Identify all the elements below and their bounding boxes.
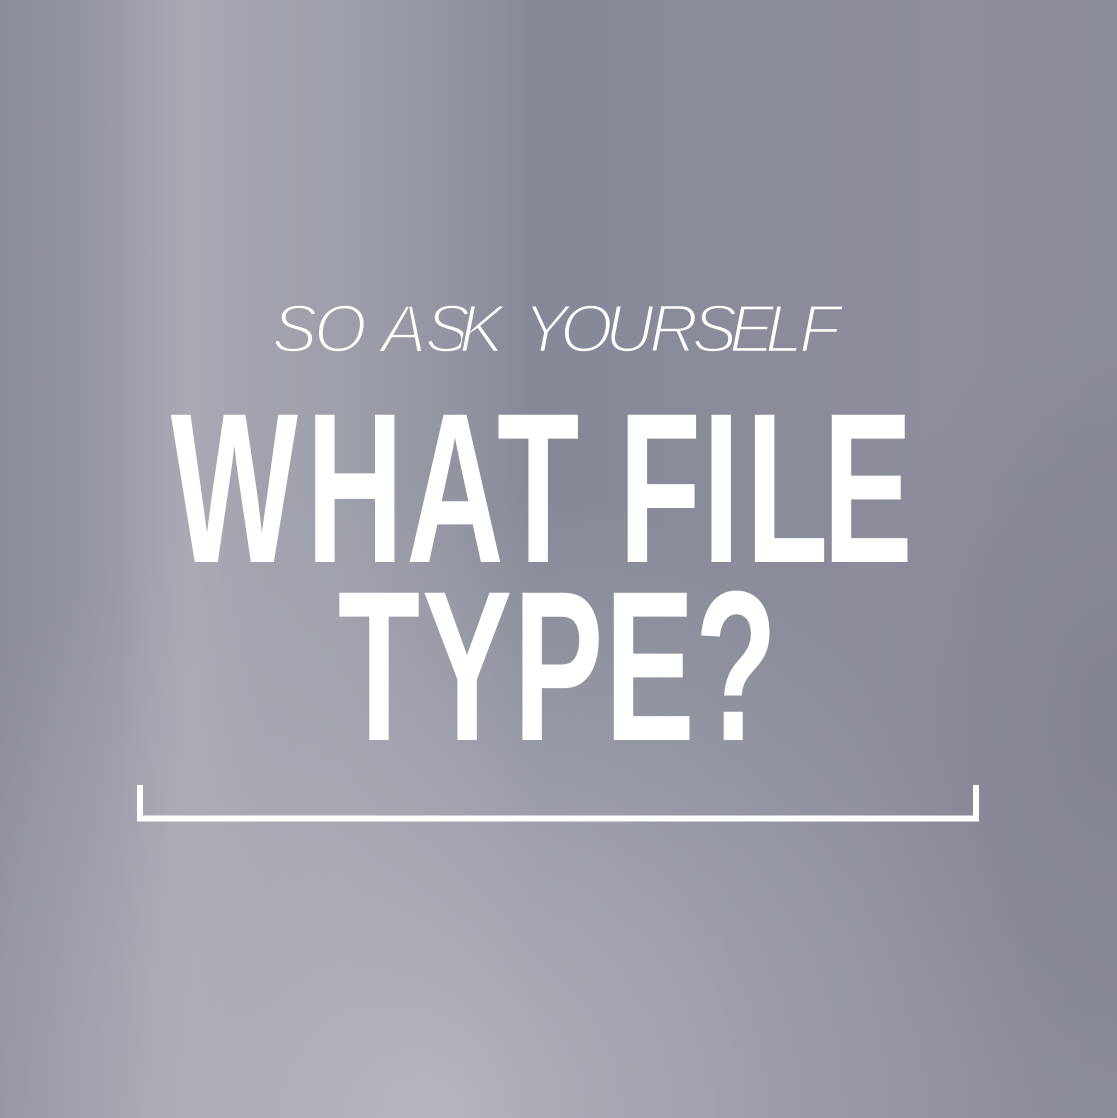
title line 2: TYPE?: [338, 546, 777, 785]
subtitle: SO ASK YOURSELF: [272, 291, 844, 367]
bracket rule: [140, 785, 976, 818]
title line 1: WHAT FILE: [171, 368, 913, 607]
title: [171, 368, 913, 785]
